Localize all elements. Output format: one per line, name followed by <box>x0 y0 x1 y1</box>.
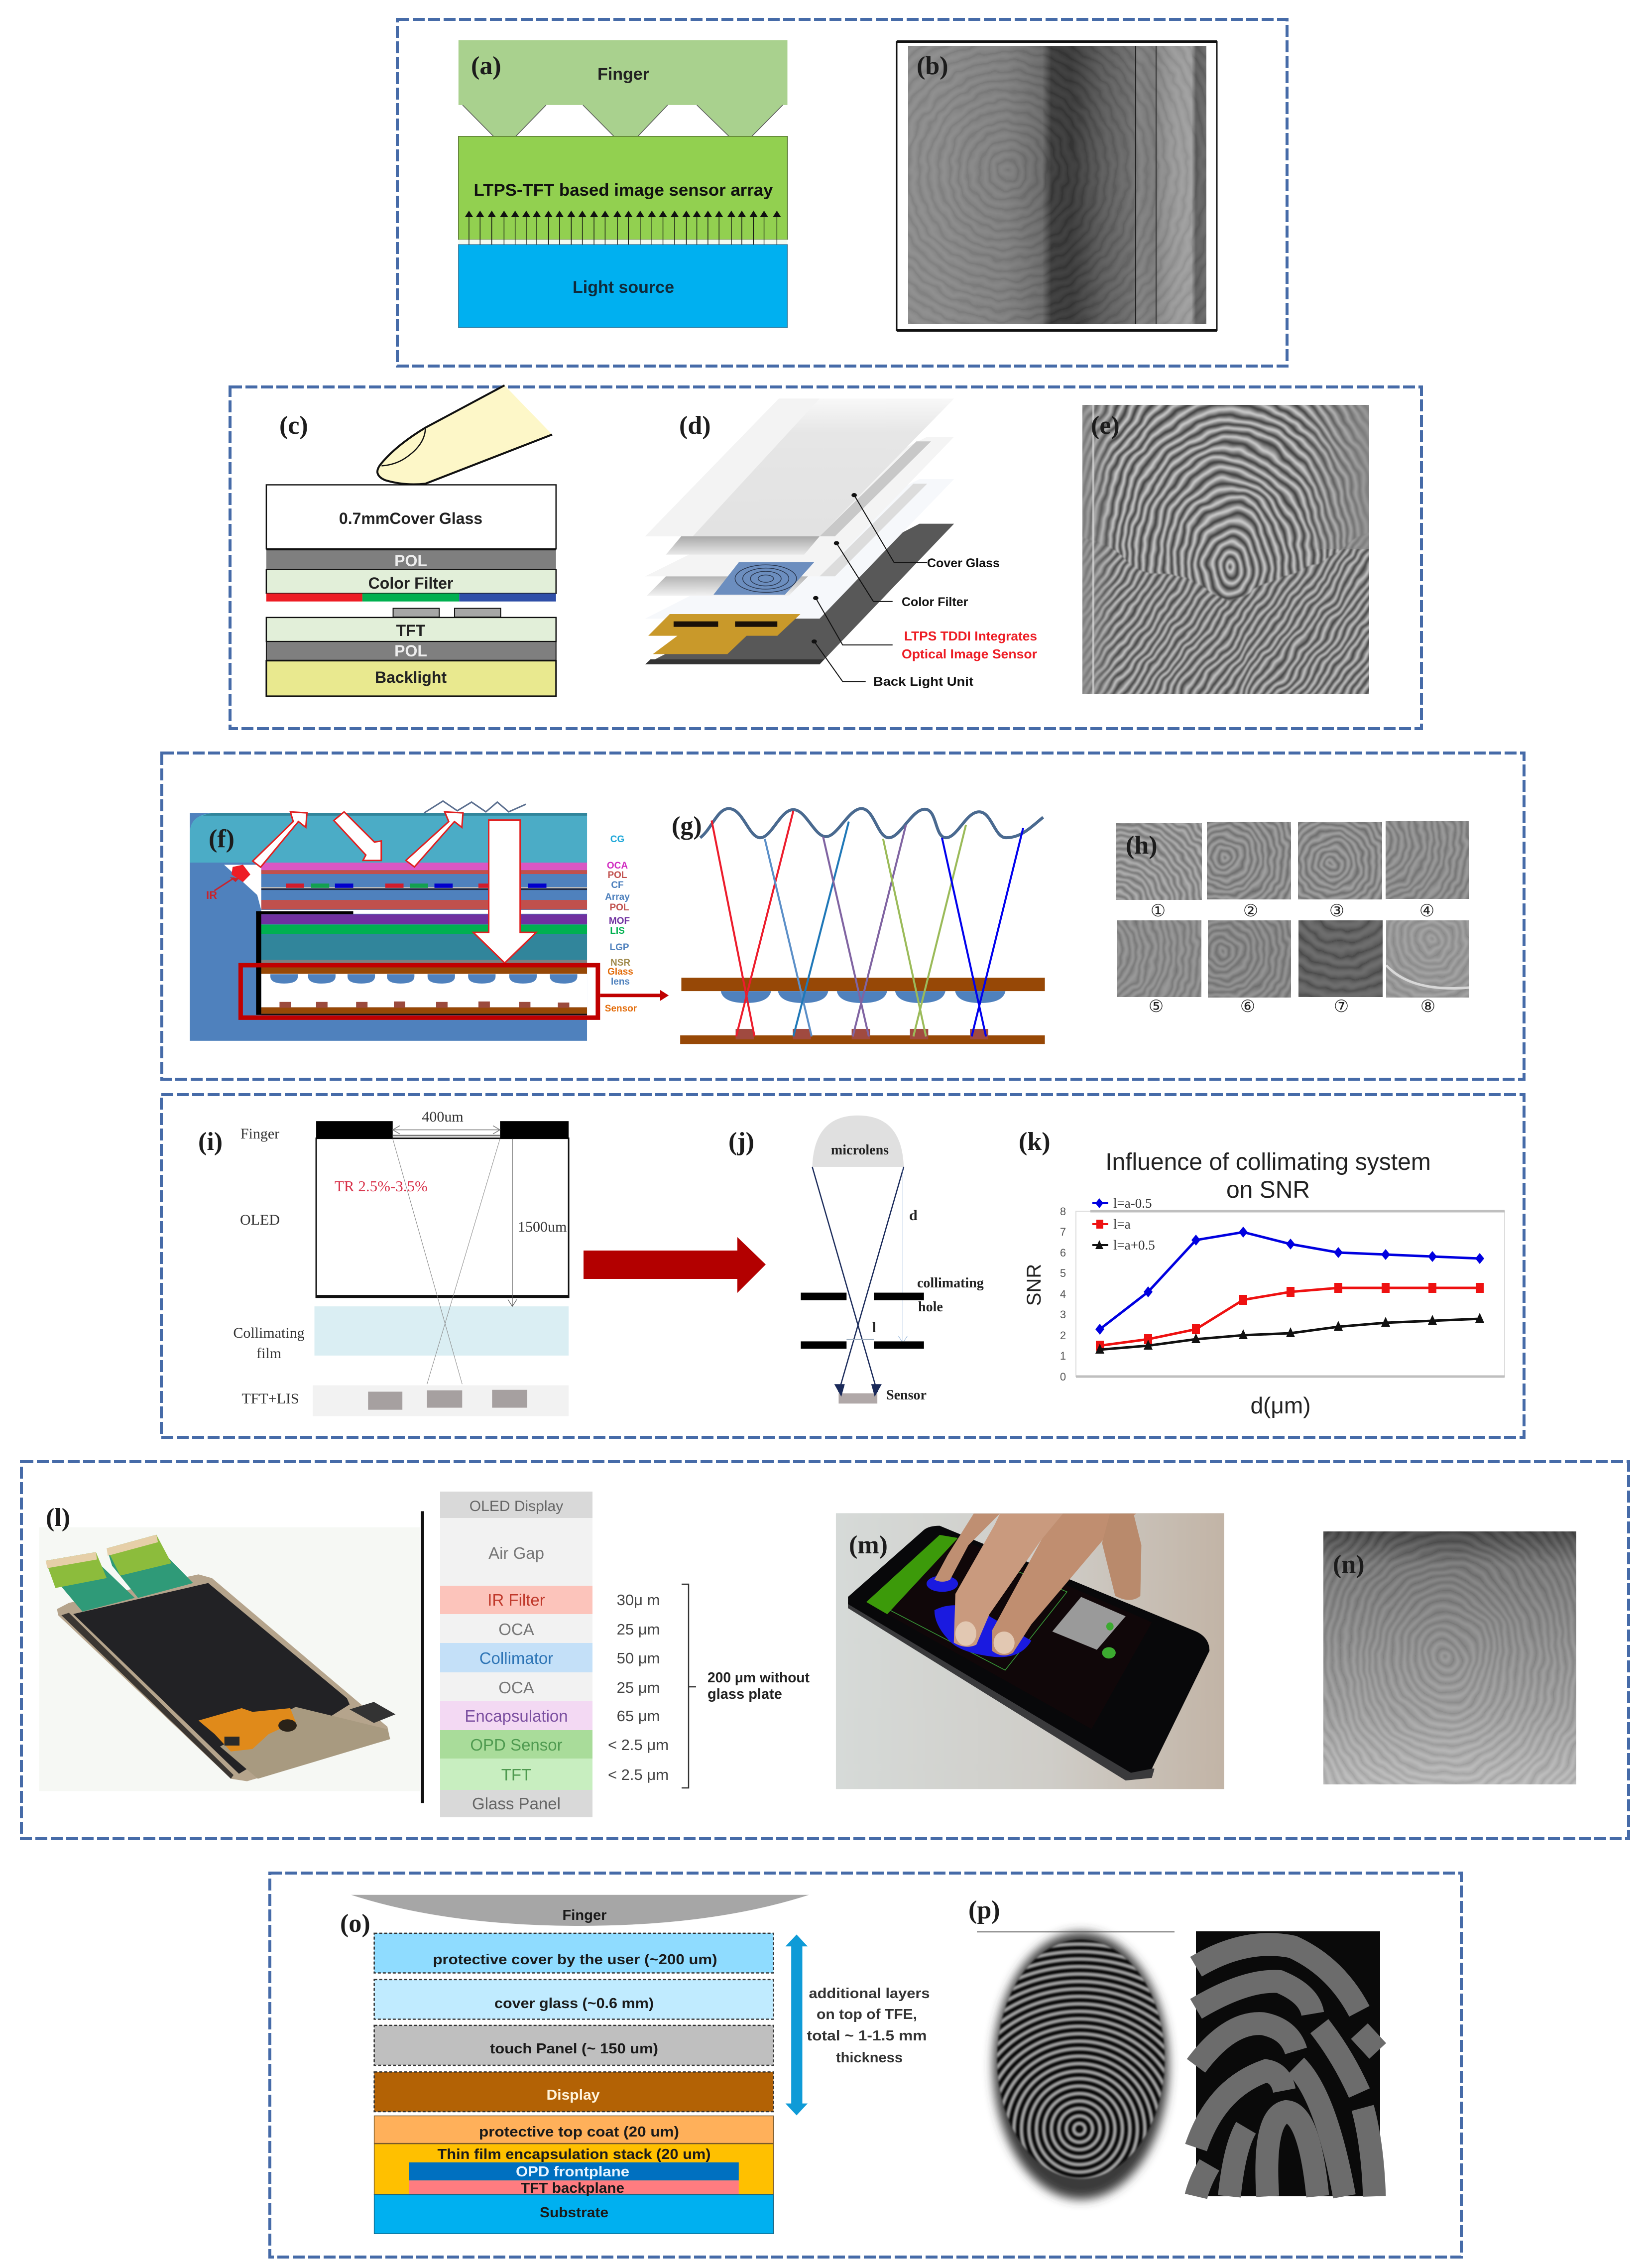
diagram (o): layer stack beneath finger: (o) <box>340 1909 370 1938</box>
diagram (a): finger on LTPS-TFT sensor array above light source <box>459 40 788 328</box>
image (n): fingerprint capture: (n) <box>1333 1550 1365 1579</box>
panel: OLED display with OPD sensor (l, m, n) <box>21 1462 1629 1839</box>
chart (k): influence of collimating system on SNR: l=a <box>1113 1217 1131 1232</box>
diagram (o): layer stack beneath finger <box>340 1895 930 2234</box>
diagram (f): display cross-section with light paths: LGP <box>609 942 629 953</box>
layer stack: OPD sensor thicknesses: IR Filter <box>487 1591 545 1609</box>
diagram (i): OLED collimating film geometry: OLED <box>240 1212 280 1228</box>
diagram (i): OLED collimating film geometry: Collimating <box>233 1325 305 1341</box>
layer stack: OPD sensor thicknesses: 50 μm <box>617 1649 660 1667</box>
image set (h): eight fingerprint crops: ④ <box>1419 901 1434 921</box>
chart (k): influence of collimating system on SNR: 5 <box>1060 1267 1066 1279</box>
diagram (o): layer stack beneath finger: TFT backplane <box>521 2180 624 2196</box>
photo (l): OLED display module <box>39 1504 424 1803</box>
photo (l): OLED display module: (l) <box>46 1504 70 1532</box>
chart (k): influence of collimating system on SNR: SNR <box>1023 1264 1045 1306</box>
chart (k): influence of collimating system on SNR: on SNR <box>1226 1177 1310 1203</box>
diagram (d): exploded view of display layers: Cover Glass <box>927 556 1000 570</box>
diagram (a): finger on LTPS-TFT sensor array above light source: (a) <box>471 52 501 80</box>
diagram (c): finger on display layer stack: TFT <box>396 622 426 639</box>
diagram (a): finger on LTPS-TFT sensor array above light source: Light source <box>573 278 674 297</box>
diagram (d): exploded view of display layers: Back Light Unit <box>873 675 974 689</box>
diagram (d): exploded view of display layers: LTPS TDDI Integrates <box>904 629 1037 643</box>
photo (m): hand pressing fingers on phone <box>836 1513 1224 1789</box>
layer stack: OPD sensor thicknesses: < 2.5 μm <box>608 1766 669 1783</box>
panel: collimating film and SNR chart (i, j, k) <box>161 1095 1524 1437</box>
diagram (j): microlens collimating hole: d <box>909 1207 918 1224</box>
diagram (f): display cross-section with light paths: Glass <box>607 967 633 977</box>
diagram (f): display cross-section with light paths: LIS <box>610 926 625 936</box>
diagram (a): finger on LTPS-TFT sensor array above light source: LTPS-TFT based image sensor array <box>474 181 773 200</box>
image (b): raw fingerprint capture with vertical bands <box>893 31 1222 340</box>
image set (h): eight fingerprint crops: ⑥ <box>1240 997 1255 1016</box>
diagram (o): layer stack beneath finger: Display <box>547 2087 599 2103</box>
diagram (j): microlens collimating hole: (j) <box>728 1128 754 1156</box>
photo (m): hand pressing fingers on phone: (m) <box>849 1531 888 1559</box>
diagram (f): display cross-section with light paths: Sensor <box>605 1004 637 1014</box>
diagram (c): finger on display layer stack <box>266 385 556 696</box>
image set (h): eight fingerprint crops: ⑦ <box>1334 997 1349 1016</box>
chart (k): influence of collimating system on SNR: 8 <box>1060 1205 1066 1218</box>
chart (k): influence of collimating system on SNR: l=a+0.5 <box>1113 1238 1155 1253</box>
diagram (f): display cross-section with light paths: Array <box>605 892 630 902</box>
image set (h): eight fingerprint crops: ② <box>1243 901 1258 921</box>
diagram (i): OLED collimating film geometry: (i) <box>198 1128 223 1156</box>
diagram (i): OLED collimating film geometry <box>198 1109 569 1416</box>
chart (k): influence of collimating system on SNR: Influence of collimating system <box>1105 1149 1431 1175</box>
diagram (f): display cross-section with light paths: CF <box>611 880 624 890</box>
layer stack: OPD sensor thicknesses: 65 μm <box>617 1707 660 1725</box>
diagram (c): finger on display layer stack: POL <box>394 552 427 570</box>
diagram (c): finger on display layer stack: 0.7mmCover Glass <box>339 509 482 527</box>
diagram (i): OLED collimating film geometry: 1500um <box>518 1219 567 1235</box>
image (n): fingerprint capture <box>1303 1512 1596 1804</box>
diagram (o): layer stack beneath finger: total ~ 1-1.5 mm <box>807 2028 927 2044</box>
layer stack: OPD sensor thicknesses: Collimator <box>479 1649 553 1667</box>
diagram (o): layer stack beneath finger: Substrate <box>540 2205 608 2221</box>
diagram (d): exploded view of display layers: Optical Image Sensor <box>902 646 1037 661</box>
diagram (o): layer stack beneath finger: on top of TFE, <box>817 2007 917 2022</box>
diagram (j): microlens collimating hole: hole <box>918 1299 943 1315</box>
chart (k): influence of collimating system on SNR: 6 <box>1060 1247 1066 1259</box>
chart (k): influence of collimating system on SNR: 7 <box>1060 1226 1066 1238</box>
chart (k): influence of collimating system on SNR: 1 <box>1060 1350 1066 1362</box>
panel: thin-film OPD stack and fingerprints (o, p) <box>270 1873 1461 2257</box>
layer stack: OPD sensor thicknesses: TFT <box>501 1765 531 1784</box>
diagram (j): microlens collimating hole <box>728 1116 984 1403</box>
layer stack: OPD sensor thicknesses: Glass Panel <box>472 1794 561 1813</box>
layer stack: OPD sensor thicknesses: OLED Display <box>470 1498 563 1514</box>
chart (k): influence of collimating system on SNR: d(μm) <box>1250 1392 1311 1418</box>
diagram (f): display cross-section with light paths: CG <box>610 834 624 845</box>
diagram (d): exploded view of display layers: (d) <box>679 411 711 440</box>
diagram (o): layer stack beneath finger: protective cover by the user (~200 um) <box>433 1952 717 1968</box>
layer stack: OPD sensor thicknesses: 30μ m <box>617 1591 660 1609</box>
images (p): full fingerprint and magnified ridges <box>968 1896 1380 2199</box>
chart (k): influence of collimating system on SNR: (k) <box>1019 1128 1051 1156</box>
image (e): fingerprint capture: (e) <box>1091 411 1120 440</box>
chart (k): influence of collimating system on SNR: 3 <box>1060 1308 1066 1321</box>
diagram (f): display cross-section with light paths: (f) <box>209 825 235 853</box>
diagram (i): OLED collimating film geometry: Finger <box>240 1126 279 1142</box>
diagram (i): OLED collimating film geometry: TFT+LIS <box>241 1390 299 1407</box>
panel: microlens under-display sensor (f, g, h) <box>162 753 1524 1079</box>
diagram (g): microlens array light paths: (g) <box>672 812 702 840</box>
diagram (o): layer stack beneath finger: thickness <box>836 2050 903 2066</box>
diagram (o): layer stack beneath finger: cover glass (~0.6 mm) <box>494 1996 654 2012</box>
image set (h): eight fingerprint crops: ⑧ <box>1420 997 1435 1016</box>
layer stack: OPD sensor thicknesses: 200 μm without <box>707 1670 810 1686</box>
panel: LTPS TDDI optical sensor (c, d, e) <box>230 385 1421 729</box>
diagram (o): layer stack beneath finger: additional layers <box>809 1986 930 2002</box>
diagram (i): OLED collimating film geometry: film <box>256 1345 281 1362</box>
diagram (f): display cross-section with light paths: IR <box>206 889 217 901</box>
image set (h): eight fingerprint crops <box>1106 811 1479 1016</box>
diagram (j): microlens collimating hole: l <box>872 1320 876 1336</box>
panel: LTPS-TFT image sensor (a, b) <box>397 19 1287 366</box>
layer stack: OPD sensor thicknesses: 25 μm <box>617 1621 660 1638</box>
diagram (f): display cross-section with light paths: POL <box>607 870 627 881</box>
chart (k): influence of collimating system on SNR <box>1019 1128 1505 1418</box>
diagram (j): microlens collimating hole: microlens <box>831 1142 889 1158</box>
diagram (f): display cross-section with light paths: POL <box>609 902 629 913</box>
layer stack: OPD sensor thicknesses: 25 μm <box>617 1679 660 1696</box>
diagram (f): display cross-section with light paths: lens <box>611 977 630 987</box>
diagram (o): layer stack beneath finger: touch Panel (~ 150 um) <box>490 2041 658 2057</box>
diagram (c): finger on display layer stack: Backlight <box>375 668 447 686</box>
diagram (f): display cross-section with light paths: NSR <box>610 958 630 968</box>
diagram (o): layer stack beneath finger: OPD frontplane <box>516 2164 629 2180</box>
layer stack: OPD sensor thicknesses: OCA <box>498 1620 534 1638</box>
image (e): fingerprint capture <box>1082 405 1369 694</box>
diagram (d): exploded view of display layers <box>645 398 1037 689</box>
diagram (c): finger on display layer stack: POL <box>394 642 427 660</box>
image set (h): eight fingerprint crops: (h) <box>1126 831 1158 860</box>
diagram (f): display cross-section with light paths: MOF <box>609 916 630 926</box>
layer stack: OPD sensor thicknesses <box>440 1492 810 1817</box>
layer stack: OPD sensor thicknesses: Air Gap <box>488 1544 544 1562</box>
images (p): full fingerprint and magnified ridges: (p) <box>968 1896 1000 1924</box>
image set (h): eight fingerprint crops: ③ <box>1329 901 1344 921</box>
layer stack: OPD sensor thicknesses: OCA <box>498 1678 534 1697</box>
diagram (i): OLED collimating film geometry: TR 2.5%-3.5% <box>335 1177 428 1195</box>
diagram (c): finger on display layer stack: Color Filter <box>368 574 453 592</box>
diagram (a): finger on LTPS-TFT sensor array above light source: Finger <box>597 65 649 84</box>
chart (k): influence of collimating system on SNR: 0 <box>1060 1371 1066 1383</box>
layer stack: OPD sensor thicknesses: < 2.5 μm <box>608 1736 669 1754</box>
diagram (o): layer stack beneath finger: Thin film encapsulation stack (20 um) <box>437 2146 711 2162</box>
diagram (j): microlens collimating hole: collimating <box>917 1275 984 1291</box>
layer stack: OPD sensor thicknesses: OPD Sensor <box>470 1736 563 1754</box>
diagram (c): finger on display layer stack: (c) <box>279 411 308 440</box>
diagram (g): microlens array light paths <box>672 809 1045 1044</box>
diagram (o): layer stack beneath finger: Finger <box>563 1907 606 1923</box>
layer stack: OPD sensor thicknesses: Encapsulation <box>465 1707 568 1725</box>
diagram (o): layer stack beneath finger: protective top coat (20 um) <box>479 2124 679 2140</box>
diagram (f): display cross-section with light paths <box>190 801 669 1041</box>
image (b): raw fingerprint capture with vertical bands: (b) <box>917 52 948 80</box>
chart (k): influence of collimating system on SNR: l=a-0.5 <box>1113 1196 1152 1211</box>
chart (k): influence of collimating system on SNR: 2 <box>1060 1329 1066 1342</box>
image set (h): eight fingerprint crops: ⑤ <box>1149 997 1164 1016</box>
image set (h): eight fingerprint crops: ① <box>1151 901 1166 921</box>
layer stack: OPD sensor thicknesses: glass plate <box>707 1686 782 1702</box>
chart (k): influence of collimating system on SNR: 4 <box>1060 1288 1066 1300</box>
diagram (i): OLED collimating film geometry: 400um <box>422 1109 464 1125</box>
diagram (d): exploded view of display layers: Color Filter <box>902 595 968 609</box>
diagram (j): microlens collimating hole: Sensor <box>886 1387 927 1403</box>
diagram (f): display cross-section with light paths: OCA <box>607 861 628 871</box>
arrow: big red arrow from (i) to (j) <box>584 1237 766 1293</box>
